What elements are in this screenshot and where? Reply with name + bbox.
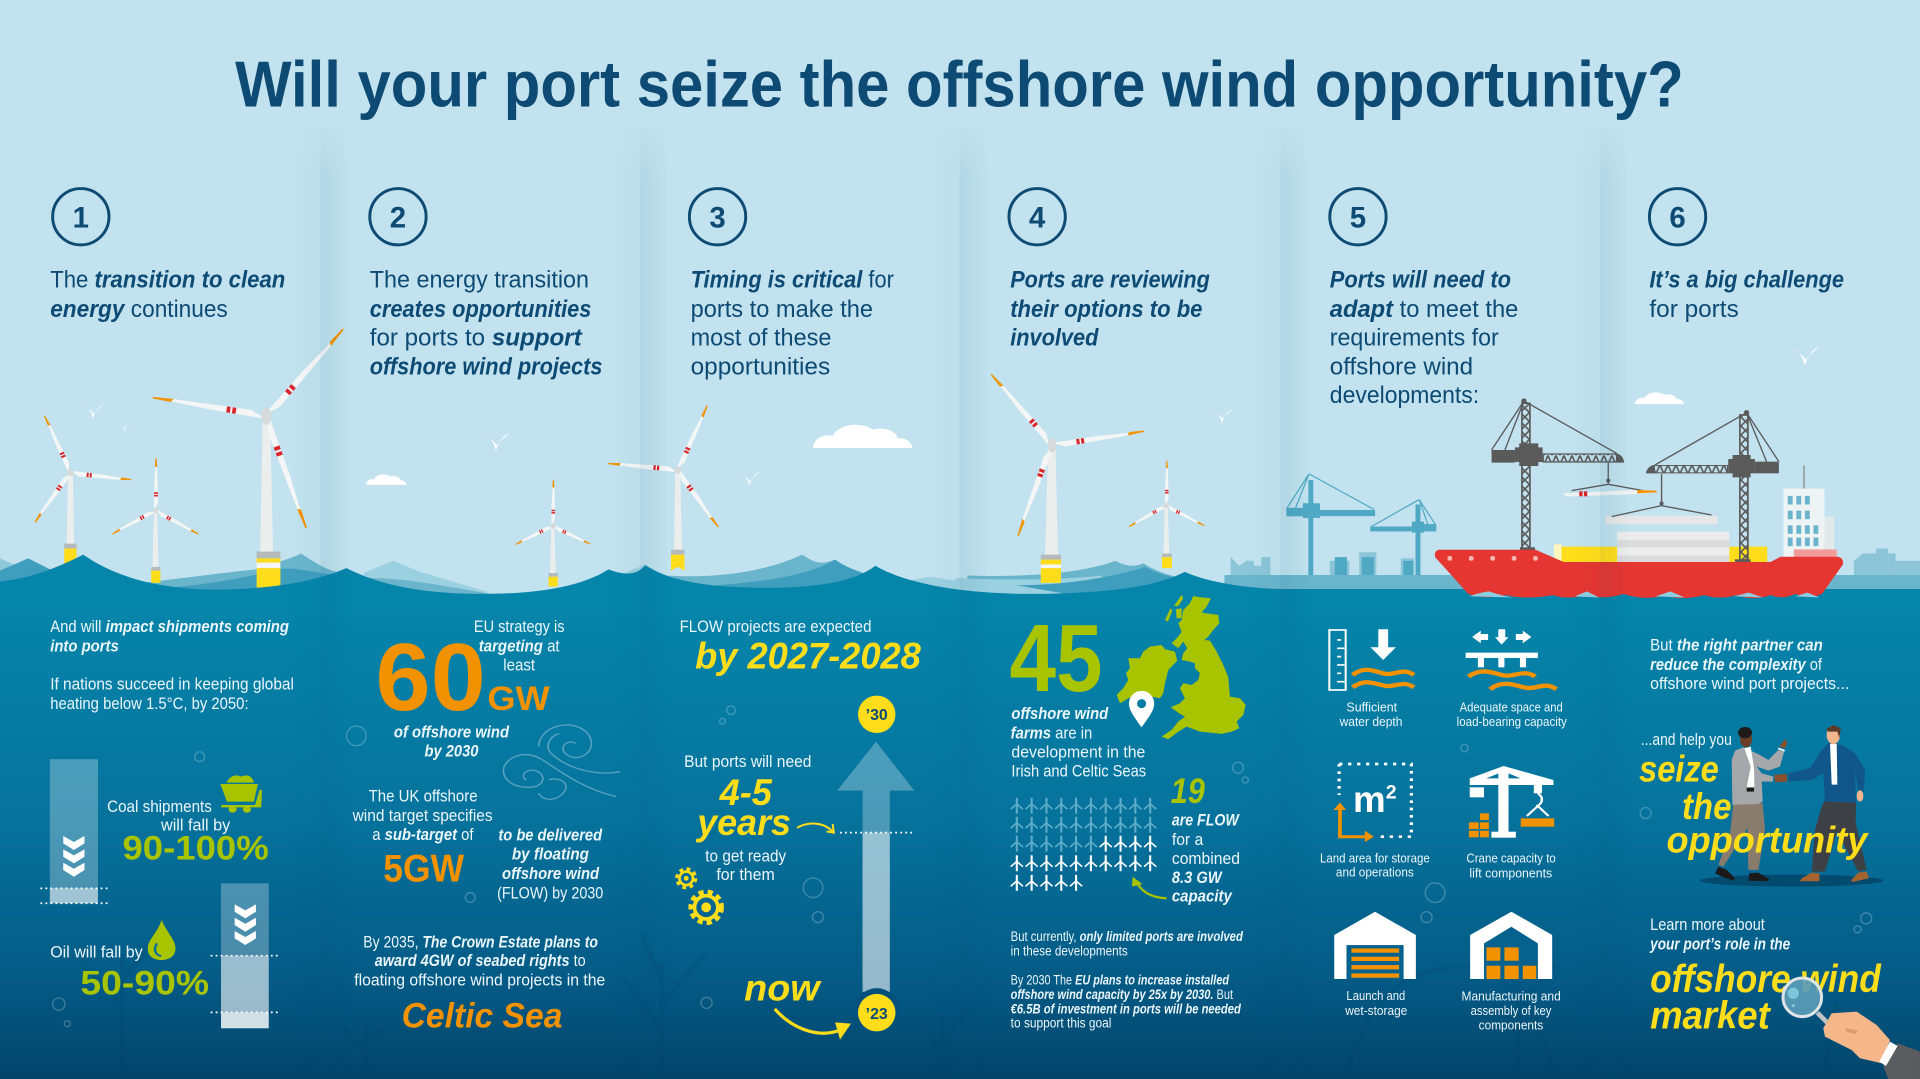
marker 2030: ’30	[866, 707, 888, 724]
icon: crane capacity	[1469, 766, 1554, 838]
timeline arrow	[837, 696, 914, 1032]
seize the opportunity	[1639, 730, 1869, 861]
label: water depth: Sufficient	[1346, 699, 1398, 714]
marker 2023	[855, 988, 899, 1032]
shipments text: If nations succeed in keeping global	[50, 674, 294, 693]
EU plans text	[1011, 972, 1242, 1031]
of offshore wind by 2030: of offshore wind	[394, 723, 510, 742]
heading 1: The transition to clean	[50, 267, 285, 294]
wind farms text: development in the	[1011, 742, 1145, 761]
Crown Estate text	[354, 932, 605, 990]
heading 2: offshore wind projects	[370, 354, 602, 381]
icon: coal cart	[220, 775, 262, 813]
4-5 years: for them	[716, 865, 775, 884]
heading 3: ports to make the	[691, 296, 873, 323]
shipments text: heating below 1.5°C, by 2050:	[50, 694, 249, 713]
UK sub-target text: a sub-target of	[372, 825, 474, 844]
arrow: now to 2023	[775, 1009, 851, 1040]
step number 4	[1009, 189, 1065, 245]
icon: space and load	[1466, 629, 1556, 689]
EU plans text: offshore wind capacity by 25x by 2030. But	[1011, 987, 1233, 1002]
icon: land area: 2	[1386, 781, 1397, 803]
learn more text	[1649, 915, 1790, 953]
now: now	[744, 967, 822, 1008]
label: launch storage: Launch and	[1346, 988, 1405, 1003]
right partner text: reduce the complexity of	[1650, 655, 1822, 674]
of offshore wind by 2030: by 2030	[425, 742, 479, 761]
label: land area: and operations	[1336, 865, 1414, 880]
seize the opportunity: seize	[1639, 749, 1719, 790]
EU strategy text: EU strategy is	[474, 617, 564, 636]
coal text: will fall by	[160, 816, 231, 835]
4-5 years: years	[695, 802, 791, 843]
sea	[0, 555, 1920, 1079]
turbine: middle left	[111, 458, 200, 583]
step number 1	[53, 189, 109, 245]
icon: launch storage shed	[1334, 912, 1416, 979]
heading 5: Ports will need to	[1330, 267, 1511, 294]
shipments text: into ports	[50, 636, 119, 655]
seize the opportunity: opportunity	[1667, 820, 1869, 861]
step number 4: 4	[1029, 202, 1046, 235]
step number 3	[689, 189, 746, 245]
crane A	[1492, 398, 1643, 550]
Celtic Sea: Celtic Sea	[402, 995, 562, 1035]
right partner text: offshore wind port projects...	[1650, 674, 1849, 693]
45 figure: 45	[1009, 606, 1103, 712]
right partner text	[1650, 636, 1849, 693]
heading 2: The energy transition	[370, 267, 589, 294]
5GW figure: 5GW	[383, 848, 464, 891]
UK sub-target text	[352, 787, 493, 844]
heading 6	[1649, 267, 1844, 323]
label: space and load: Adequate space and	[1460, 699, 1563, 714]
heading 4: their options to be	[1010, 296, 1202, 323]
step number 2: 2	[390, 202, 406, 235]
4-5 years: to get ready	[705, 847, 787, 866]
60 GW figure: 60	[376, 625, 486, 731]
label: space and load: load-bearing capacity	[1457, 714, 1567, 729]
step number 5	[1330, 189, 1386, 245]
label: land area: Land area for storage	[1320, 850, 1430, 865]
label: manufacturing: components	[1479, 1017, 1543, 1032]
EU plans text: to support this goal	[1011, 1016, 1111, 1031]
heading 2	[370, 267, 602, 381]
label: manufacturing: assembly of key	[1471, 1003, 1552, 1018]
60 GW figure: GW	[487, 680, 550, 718]
heading 4: involved	[1010, 324, 1099, 351]
icon: manufacturing hall	[1470, 912, 1552, 979]
FLOW timing	[680, 617, 921, 677]
shipments text: And will impact shipments coming	[50, 617, 289, 636]
heading 6: It’s a big challenge	[1649, 267, 1844, 294]
coal text: Coal shipments	[107, 797, 212, 816]
label: crane capacity: lift components	[1469, 865, 1552, 880]
panel 6	[1639, 189, 1920, 1079]
FLOW delivery text: to be delivered	[498, 826, 603, 845]
turbine pictogram grid	[1011, 798, 1156, 891]
FLOW timing: by 2027-2028	[695, 636, 921, 677]
ship cargo, cranes and loads	[1492, 398, 1779, 562]
city skyline silhouette	[1231, 549, 1920, 575]
step number 1: 1	[73, 202, 89, 235]
FLOW capacity text: capacity	[1172, 887, 1233, 906]
learn more text: your port’s role in the	[1649, 934, 1790, 953]
label: water depth: water depth	[1339, 714, 1402, 729]
heading 2: for ports to support	[370, 324, 582, 351]
icon: water depth	[1329, 629, 1414, 690]
heading 4: Ports are reviewing	[1010, 267, 1210, 294]
FLOW delivery text: (FLOW) by 2030	[497, 883, 603, 902]
panel 2	[352, 189, 605, 1035]
4-5 years: But ports will need	[684, 752, 811, 771]
ship with cranes	[1435, 398, 1843, 598]
heading 3	[691, 267, 894, 381]
label: crane capacity: Crane capacity to	[1466, 851, 1556, 866]
of offshore wind by 2030	[394, 723, 510, 761]
wind farms text: offshore wind	[1011, 704, 1109, 723]
cargo slabs	[1606, 516, 1729, 562]
FLOW capacity text: for a	[1172, 830, 1204, 849]
label: manufacturing	[1462, 988, 1561, 1032]
arrow: to dotted line	[797, 824, 834, 833]
map: UK and Ireland	[1117, 595, 1246, 739]
Crown Estate text: floating offshore wind projects in the	[354, 971, 605, 990]
ship hull	[1435, 550, 1843, 598]
wind swirl	[503, 725, 620, 799]
Crown Estate text: By 2035, The Crown Estate plans to	[363, 932, 598, 951]
illustration: hand with magnifier	[1783, 978, 1920, 1079]
EU strategy text	[474, 617, 564, 675]
icon: location pin	[1129, 691, 1154, 727]
crane B	[1612, 410, 1779, 562]
turbine blade cargo	[1563, 490, 1657, 497]
icon: land area	[1333, 764, 1411, 842]
Crown Estate text: award 4GW of seabed rights to	[375, 951, 586, 970]
FLOW capacity text	[1172, 811, 1240, 906]
FLOW delivery text: by floating	[512, 845, 589, 864]
wind farms text: farms are in	[1011, 723, 1092, 742]
coal bar	[40, 759, 108, 903]
UK sub-target text: wind target specifies	[352, 806, 493, 825]
FLOW delivery text	[497, 826, 603, 902]
icon: gears	[677, 869, 721, 923]
shipments text	[50, 617, 294, 713]
learn more text: Learn more about	[1650, 915, 1765, 934]
EU strategy text: targeting at	[479, 636, 560, 655]
heading 3: opportunities	[691, 354, 830, 381]
heading 3: Timing is critical for	[691, 267, 894, 294]
limited ports text: But currently, only limited ports are involved	[1011, 929, 1244, 944]
bubbles	[53, 706, 1872, 1027]
heading 5	[1330, 267, 1518, 409]
panel 1	[40, 189, 294, 1028]
icon: land area: m	[1353, 779, 1386, 820]
containers	[1554, 544, 1767, 562]
offshore wind market: market	[1650, 995, 1772, 1038]
panel 5	[1320, 189, 1567, 1032]
FLOW timing: FLOW projects are expected	[680, 617, 871, 636]
seize the opportunity: the	[1682, 786, 1731, 827]
EU plans text: €6.5B of investment in ports will be needed	[1011, 1001, 1242, 1016]
seabed coral silhouettes	[86, 937, 1837, 1079]
oil text: Oil will fall by	[50, 943, 143, 962]
background cranes	[1286, 474, 1436, 575]
FLOW capacity text: are FLOW	[1172, 811, 1240, 830]
icon: oil drop	[148, 920, 175, 960]
birds and clouds	[82, 346, 1820, 486]
coal text	[107, 797, 269, 868]
fold shading	[320, 153, 1618, 598]
waves behind	[0, 553, 1278, 600]
step number 6: 6	[1669, 202, 1686, 235]
step number 6	[1649, 189, 1706, 245]
label: water depth	[1339, 699, 1402, 729]
heading 2: creates opportunities	[370, 296, 591, 323]
turbine: column 2	[515, 480, 591, 587]
oil text	[50, 943, 209, 1002]
4-5 years	[684, 752, 811, 884]
step number 5: 5	[1350, 202, 1366, 235]
port building	[1783, 465, 1837, 557]
EU strategy text: least	[503, 656, 535, 675]
turbine: column 4 small	[1128, 460, 1205, 568]
heading 4	[1010, 267, 1210, 351]
step number 2	[370, 189, 426, 245]
turbine: large left	[152, 327, 346, 588]
oil text: 50-90%	[80, 964, 209, 1002]
right partner text: But the right partner can	[1650, 636, 1823, 655]
label: land area	[1320, 850, 1430, 880]
FLOW capacity text: 8.3 GW	[1172, 868, 1223, 887]
title: Will your port seize the offshore wind opportunity?	[235, 48, 1684, 121]
turbine: column 4 large	[989, 373, 1144, 583]
portholes	[1447, 556, 1538, 561]
offshore wind market: offshore wind	[1650, 958, 1882, 1001]
waterline	[1469, 591, 1820, 598]
step number 3: 3	[709, 202, 726, 235]
heading 3: most of these	[691, 324, 831, 351]
coal text: 90-100%	[122, 830, 269, 868]
FLOW delivery text: offshore wind	[502, 864, 600, 883]
label: space and load	[1457, 699, 1567, 729]
offshore wind market	[1650, 958, 1882, 1038]
wind farms text	[1011, 704, 1146, 781]
panel 4	[1009, 189, 1246, 1031]
limited ports text	[1011, 929, 1244, 959]
heading 5: offshore wind	[1330, 354, 1473, 381]
wind farms text: Irish and Celtic Seas	[1011, 762, 1146, 781]
60 GW figure	[376, 625, 550, 731]
EU plans text: By 2030 The EU plans to increase installed	[1011, 972, 1230, 987]
heading 5: adapt to meet the	[1330, 296, 1518, 323]
oil bar	[211, 883, 279, 1028]
heading 1: energy continues	[50, 296, 228, 323]
panel 3	[677, 189, 921, 1040]
heading 5: developments:	[1330, 382, 1479, 409]
4-5 years: 4-5	[719, 772, 772, 813]
UK sub-target text: The UK offshore	[369, 787, 478, 806]
marker 2030	[858, 696, 895, 733]
heading 1	[50, 267, 285, 323]
turbine: small left	[33, 415, 131, 566]
label: launch storage	[1344, 988, 1407, 1018]
heading 6: for ports	[1649, 296, 1739, 323]
label: manufacturing: Manufacturing and	[1462, 988, 1561, 1003]
19 figure: 19	[1171, 771, 1205, 811]
heading 5: requirements for	[1330, 324, 1499, 351]
arrow: green to FLOW turbines	[1132, 877, 1167, 898]
marker 2023: ’23	[866, 1006, 888, 1023]
FLOW capacity text: combined	[1172, 849, 1240, 868]
flat harbour water band	[1224, 575, 1920, 590]
seize the opportunity: ...and help you	[1641, 730, 1732, 749]
label: launch storage: wet-storage	[1344, 1003, 1407, 1018]
illustration: handshake	[1700, 725, 1883, 887]
label: crane capacity	[1466, 851, 1556, 880]
limited ports text: in these developments	[1011, 944, 1128, 959]
turbine: column 3	[608, 404, 720, 571]
